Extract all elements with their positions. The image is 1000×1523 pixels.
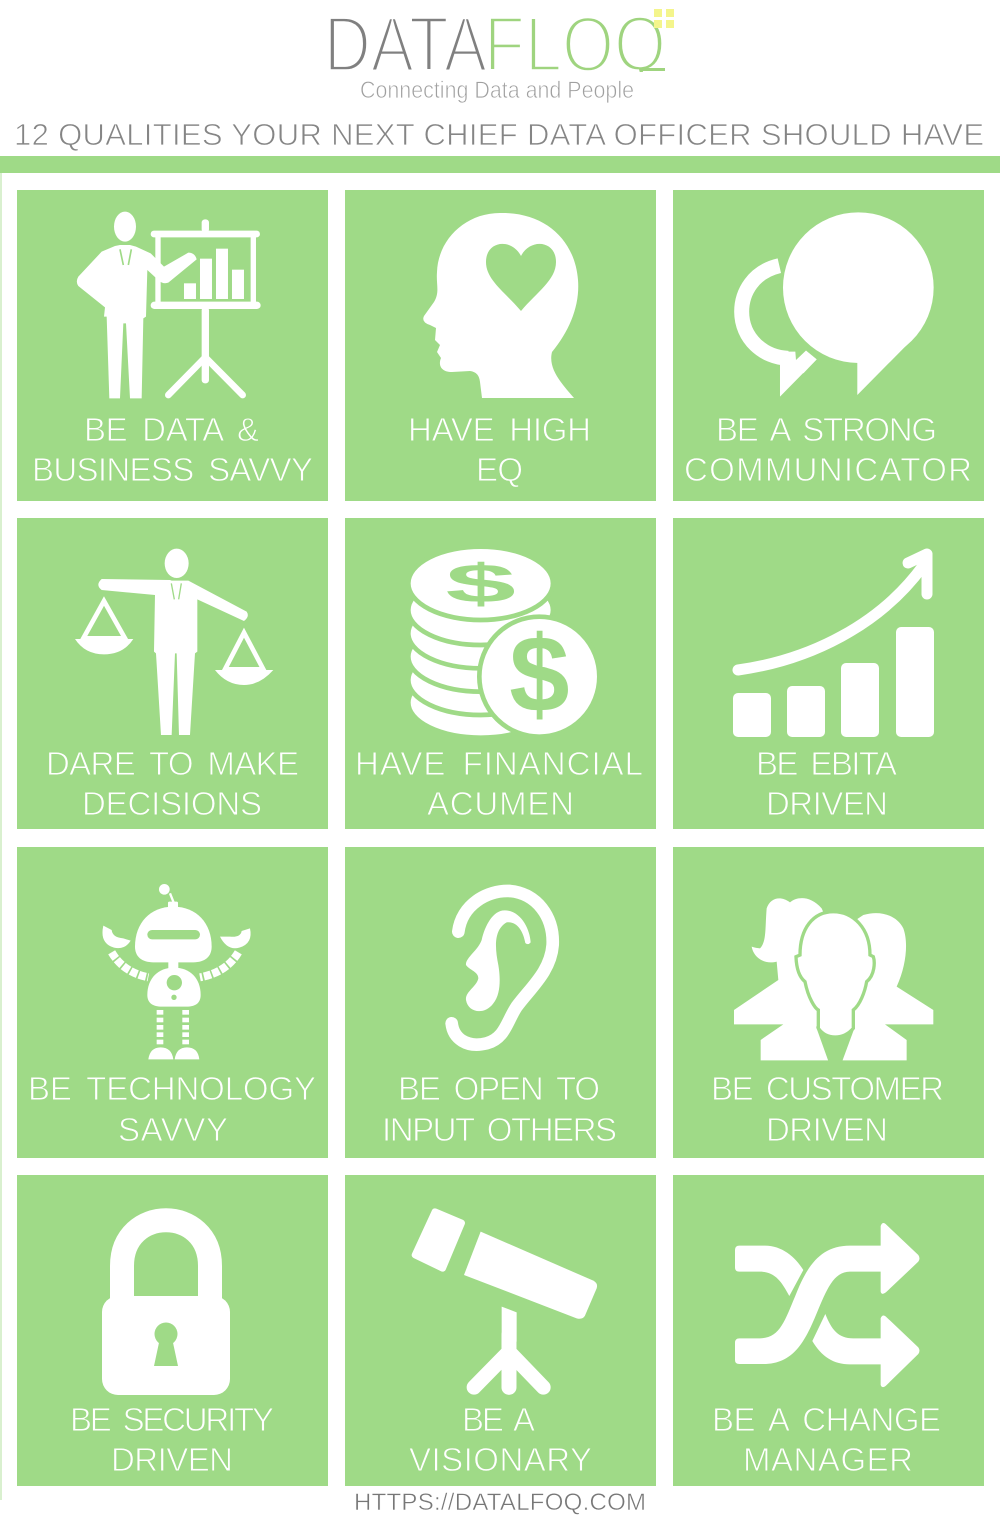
icon: coin stack with dollar: $ xyxy=(445,553,516,614)
icon: head with heart xyxy=(423,213,578,398)
label: BE CUSTOMER xyxy=(711,1070,944,1107)
label: DARE TO MAKE xyxy=(46,745,299,782)
panel: be a visionary xyxy=(345,1175,656,1486)
panel: be technology savvy xyxy=(17,847,328,1158)
label: BE EBITA xyxy=(756,745,897,782)
icon: coin stack with dollar xyxy=(408,547,599,738)
label xyxy=(712,1401,941,1478)
label: SAVVY xyxy=(118,1111,228,1148)
label: BE A CHANGE xyxy=(712,1401,941,1438)
panel: have financial acumen xyxy=(345,518,656,829)
panel: be open to input others xyxy=(345,847,656,1158)
icon: padlock xyxy=(102,1220,230,1395)
label xyxy=(711,1070,944,1148)
label: HAVE FINANCIAL xyxy=(355,745,643,782)
label: DECISIONS xyxy=(82,785,262,822)
icon: three people xyxy=(734,898,933,1061)
label xyxy=(28,1070,316,1148)
label: HAVE HIGH xyxy=(408,411,591,448)
logo xyxy=(324,0,674,104)
title: 12 QUALITIES YOUR NEXT CHIEF DATA OFFICER SHOULD HAVE xyxy=(14,117,984,152)
logo tagline: Connecting Data and People xyxy=(360,77,634,104)
label xyxy=(355,745,643,822)
label xyxy=(70,1401,274,1478)
label xyxy=(32,411,313,488)
logo wordmark: FLOQ: FLOQ xyxy=(484,0,666,88)
panel: be a change manager xyxy=(673,1175,984,1486)
label: BE TECHNOLOGY xyxy=(28,1070,316,1107)
label xyxy=(756,745,897,822)
panel: have high eq xyxy=(345,190,656,501)
label: ACUMEN xyxy=(427,785,574,822)
icon: growth bars with arrow xyxy=(733,554,934,737)
icon: robot xyxy=(102,884,251,1059)
label: VISIONARY xyxy=(409,1441,592,1478)
panel: be data and business savvy xyxy=(17,190,328,501)
label xyxy=(408,411,591,488)
footer url: HTTPS://DATALFOQ.COM xyxy=(354,1489,646,1516)
icon: ear xyxy=(452,891,553,1045)
label xyxy=(409,1401,592,1478)
label xyxy=(46,745,299,822)
label: DRIVEN xyxy=(766,1111,888,1148)
icon: shuffle arrows xyxy=(735,1223,919,1387)
label: BE DATA & xyxy=(84,411,259,448)
label: BE OPEN TO xyxy=(398,1070,600,1107)
panel: be security driven xyxy=(17,1175,328,1486)
logo wordmark: DATA: DATA xyxy=(324,0,487,88)
label xyxy=(382,1070,617,1148)
green header bar xyxy=(0,156,1000,173)
label: BE A STRONG xyxy=(716,411,937,448)
label: COMMUNICATOR xyxy=(684,451,972,488)
icon: man as balance scale xyxy=(75,549,273,735)
label: EQ xyxy=(476,451,523,488)
label: INPUT OTHERS xyxy=(382,1111,617,1148)
label: DRIVEN xyxy=(111,1441,233,1478)
panel: be a strong communicator xyxy=(673,190,984,501)
icon: coin stack with dollar: $ xyxy=(509,613,569,734)
panel: be ebita driven xyxy=(673,518,984,829)
logo yellow squares xyxy=(654,9,674,28)
label: BUSINESS SAVVY xyxy=(32,451,313,488)
label: MANAGER xyxy=(743,1441,913,1478)
label xyxy=(684,411,972,488)
icon: telescope xyxy=(415,1212,597,1387)
label: DRIVEN xyxy=(766,785,888,822)
label: BE A xyxy=(462,1401,535,1438)
panel: dare to make decisions xyxy=(17,518,328,829)
panel: be customer driven xyxy=(673,847,984,1158)
label: BE SECURITY xyxy=(70,1401,274,1438)
icon: presenter with chart xyxy=(77,212,261,398)
icon: speech bubbles with arrow xyxy=(742,209,937,397)
